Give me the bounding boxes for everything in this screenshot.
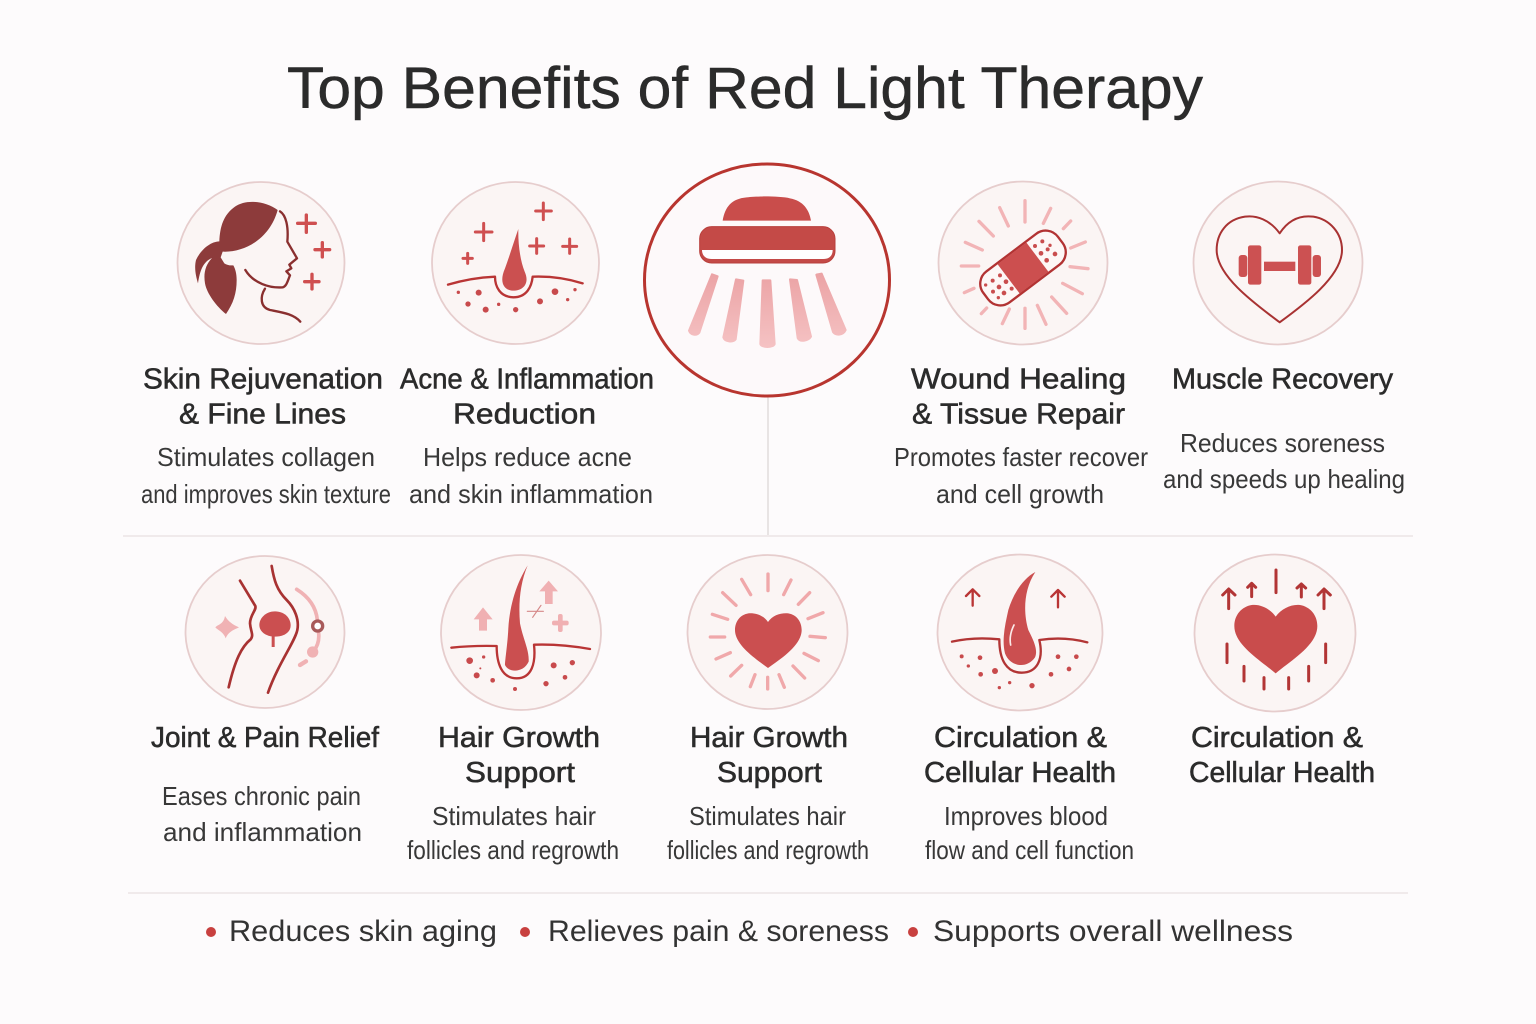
heading: acne and inflammation xyxy=(400,364,654,430)
description: hair growth support 2: Stimulates hair xyxy=(689,801,846,831)
description: skin rejuvenation: and improves skin texture xyxy=(141,479,391,509)
heading: skin rejuvenation: Skin Rejuvenation xyxy=(143,364,383,396)
icon: skin pore with drop xyxy=(432,182,599,344)
description: hair growth support 1: Stimulates hair xyxy=(432,801,596,831)
heading: circulation and cellular health 2: Cellular Health xyxy=(1189,757,1375,789)
heading: circulation and cellular health 1: Circulation & xyxy=(934,722,1107,754)
heading: circulation and cellular health 2: Circulation & xyxy=(1191,722,1363,754)
footer: key takeaways xyxy=(206,915,1293,948)
heading: hair growth support 2 xyxy=(690,722,848,789)
icon: heart with flow arrows xyxy=(1194,554,1356,712)
panel: skin rejuvenation xyxy=(141,182,391,509)
icon: knee joint xyxy=(186,556,344,708)
panel: muscle recovery xyxy=(1163,182,1405,494)
heading: hair growth support 1: Hair Growth xyxy=(438,722,600,754)
description: skin rejuvenation: Stimulates collagen xyxy=(157,442,375,472)
description: hair growth support 2 xyxy=(667,801,869,865)
heading: acne and inflammation: Acne & Inflammation xyxy=(400,364,654,396)
description: muscle recovery: and speeds up healing xyxy=(1163,464,1405,494)
heading: skin rejuvenation xyxy=(143,364,383,430)
description: joint and pain relief: and inflammation xyxy=(163,817,362,847)
panel: joint and pain relief xyxy=(151,556,380,847)
bullet: relieves pain and soreness: Relieves pain & soreness xyxy=(548,915,889,948)
panel: circulation and cellular health 1 xyxy=(924,554,1134,865)
heading: hair growth support 2: Support xyxy=(717,757,822,789)
heading: acne and inflammation: Reduction xyxy=(453,398,596,430)
description: joint and pain relief xyxy=(162,781,362,847)
panel: acne and inflammation xyxy=(400,182,654,509)
heading: wound healing: & Tissue Repair xyxy=(912,398,1125,430)
icon: follicle with small arrows xyxy=(938,554,1102,710)
heading: hair growth support 1 xyxy=(438,722,600,789)
heading: joint and pain relief: Joint & Pain Relief xyxy=(151,722,380,754)
description: circulation and cellular health 1 xyxy=(925,801,1134,865)
heading: circulation and cellular health 1: Cellular Health xyxy=(924,757,1116,789)
icon: woman profile with sparkles xyxy=(178,182,344,344)
description: joint and pain relief: Eases chronic pain xyxy=(162,781,361,811)
panel: wound healing xyxy=(894,182,1148,509)
panel: hair growth support 1 xyxy=(407,555,619,865)
icon: hair follicle with arrows xyxy=(441,555,601,710)
heading: skin rejuvenation: & Fine Lines xyxy=(179,398,346,430)
icon: central red light lamp xyxy=(644,164,890,396)
description: wound healing: Promotes faster recover xyxy=(894,442,1148,472)
description: hair growth support 1: follicles and regrowth xyxy=(407,835,619,865)
heading: muscle recovery: Muscle Recovery xyxy=(1172,364,1393,396)
description: hair growth support 2: follicles and regrowth xyxy=(667,835,869,865)
description: hair growth support 1 xyxy=(407,801,619,865)
heading: circulation and cellular health 1 xyxy=(924,722,1116,789)
title: Top Benefits of Red Light Therapy xyxy=(287,56,1203,121)
heading: circulation and cellular health 2 xyxy=(1189,722,1375,789)
description: muscle recovery xyxy=(1163,428,1405,494)
description: acne and inflammation: Helps reduce acne xyxy=(423,442,632,472)
description: skin rejuvenation xyxy=(141,442,391,509)
heading: hair growth support 1: Support xyxy=(465,757,575,789)
heading: wound healing xyxy=(911,364,1126,430)
description: acne and inflammation: and skin inflammation xyxy=(409,479,653,509)
heading: wound healing: Wound Healing xyxy=(911,364,1126,396)
bullet: reduces skin aging: Reduces skin aging xyxy=(229,915,497,948)
icon: heart with dumbbell xyxy=(1194,182,1362,344)
description: circulation and cellular health 1: Improves blood xyxy=(944,801,1108,831)
panel: circulation and cellular health 2 xyxy=(1189,554,1375,789)
icon: bandage with rays xyxy=(938,182,1108,344)
description: circulation and cellular health 1: flow and cell function xyxy=(925,835,1134,865)
description: wound healing: and cell growth xyxy=(936,479,1104,509)
description: muscle recovery: Reduces soreness xyxy=(1180,428,1385,458)
icon: heart with rays xyxy=(688,555,848,709)
bullet: supports overall wellness: Supports overall wellness xyxy=(933,915,1293,948)
description: acne and inflammation xyxy=(409,442,653,509)
heading: hair growth support 2: Hair Growth xyxy=(690,722,848,754)
description: wound healing xyxy=(894,442,1148,509)
panel: hair growth support 2 xyxy=(667,555,869,865)
